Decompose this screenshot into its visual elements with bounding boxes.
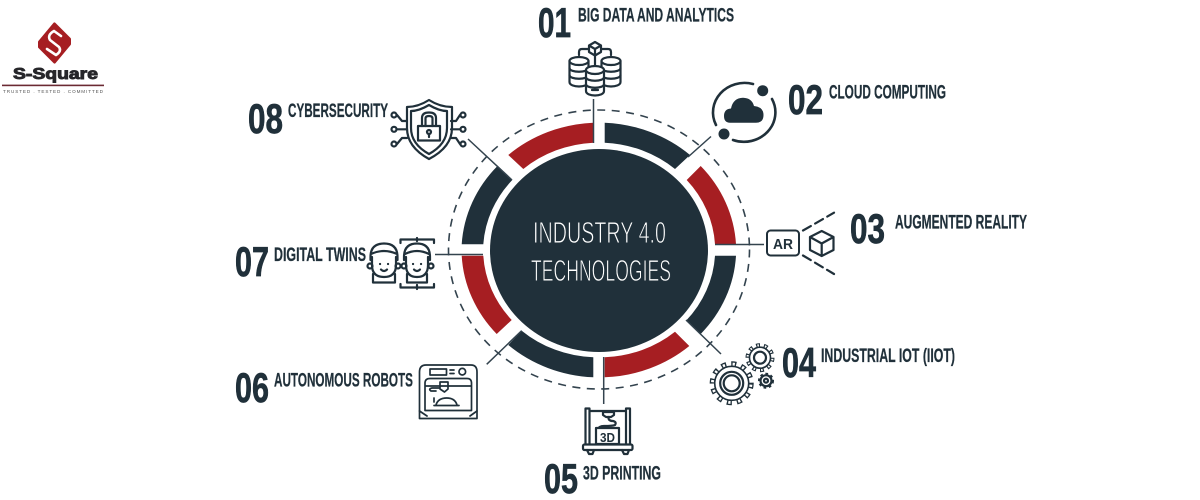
- logo: S-Square: [2, 24, 104, 94]
- logo wordmark: S-Square: [13, 66, 98, 83]
- label 07: DIGITAL TWINS: [274, 244, 366, 266]
- label 01: BIG DATA AND ANALYTICS: [578, 4, 734, 26]
- item 01: big data and analytics: [538, 0, 734, 96]
- number 08: 08: [248, 95, 283, 142]
- icon: twin faces: [368, 238, 434, 289]
- icon: cloud with orbit: [713, 83, 775, 142]
- logo tagline: TRUSTED . TESTED . COMMITTED: [3, 89, 104, 94]
- item 04: industrial iot: [712, 339, 955, 403]
- item 06: autonomous robots: [235, 364, 477, 418]
- icon: AR box and cube: AR: [773, 236, 793, 253]
- segment 3: red right: [687, 166, 736, 244]
- icon: desktop printer: [420, 365, 477, 418]
- segment 5: red bottom right: [605, 332, 689, 377]
- item 07: digital twins: [235, 238, 434, 289]
- centre title: INDUSTRY 4.0: [533, 215, 666, 250]
- label 04: INDUSTRIAL IOT (IIOT): [821, 345, 955, 367]
- icon: database cluster: [570, 42, 620, 96]
- label 08: CYBERSECURITY: [288, 100, 388, 122]
- item 08: cybersecurity: [248, 95, 466, 159]
- segment 1: red top left: [508, 123, 593, 169]
- icon: gears: [712, 345, 772, 403]
- label 03: AUGMENTED REALITY: [895, 212, 1027, 234]
- item 02: cloud computing: [713, 76, 946, 142]
- logo mark: red diamond: [40, 24, 70, 62]
- segment 8: dark upper left: [462, 166, 512, 244]
- number 01: 01: [538, 0, 571, 46]
- segment 7: red left: [462, 256, 512, 334]
- segment 6: dark bottom left: [508, 331, 593, 377]
- segmented ring: [462, 123, 736, 377]
- label 06: AUTONOMOUS ROBOTS: [274, 370, 413, 392]
- item 03: augmented reality: [767, 205, 1027, 274]
- centre circle: [490, 149, 708, 352]
- segment 2: dark top right: [605, 123, 690, 169]
- icon: AR box and cube: [767, 213, 834, 274]
- centre title: [531, 215, 671, 288]
- connector lines: [435, 99, 764, 404]
- number 04: 04: [782, 339, 816, 386]
- number 03: 03: [850, 205, 885, 252]
- number 07: 07: [235, 238, 269, 285]
- dashed outer ring: [448, 110, 750, 389]
- item 05: 3d printing: [544, 408, 661, 500]
- icon: shield with lock: [392, 100, 466, 159]
- segment 4: dark lower right: [686, 256, 736, 334]
- label 05: 3D PRINTING: [583, 462, 661, 484]
- number 06: 06: [235, 364, 269, 411]
- label 02: CLOUD COMPUTING: [829, 82, 946, 104]
- logo rule: [2, 85, 104, 86]
- number 02: 02: [788, 76, 823, 123]
- icon: 3d printer: 3D: [600, 430, 615, 445]
- centre title: TECHNOLOGIES: [531, 253, 671, 288]
